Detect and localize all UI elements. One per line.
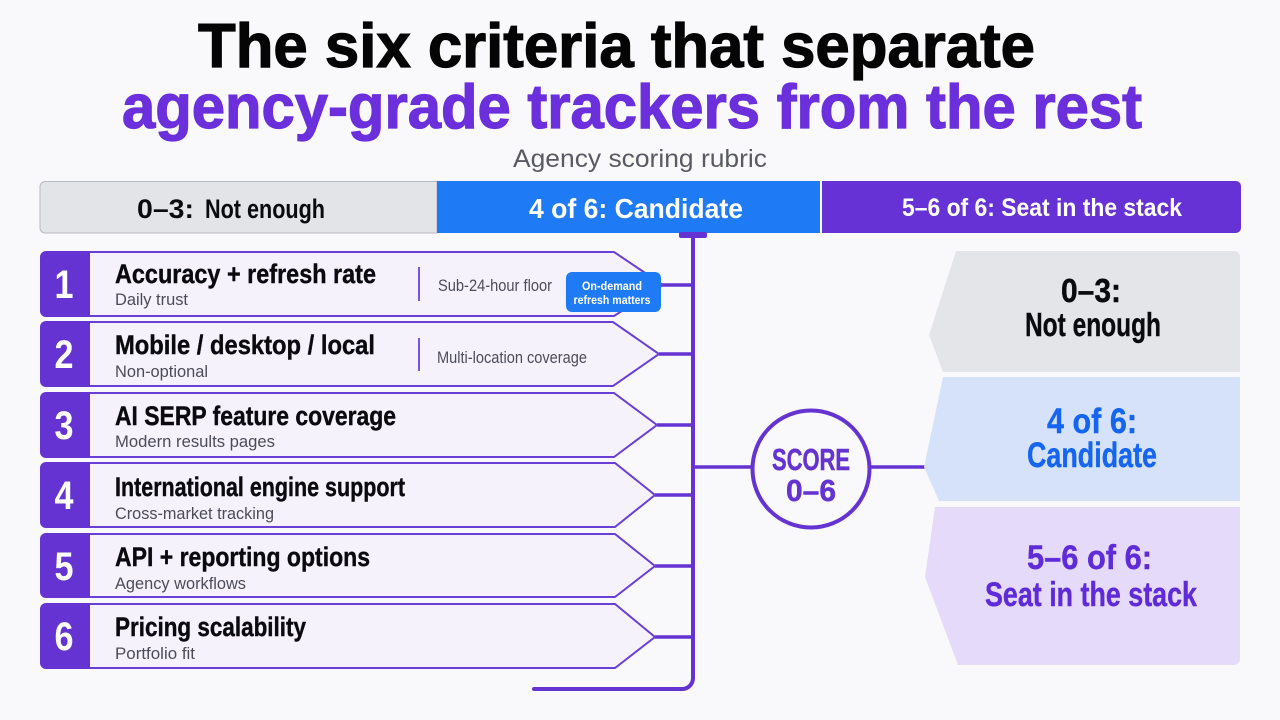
criterion 2: Non-optional: [115, 362, 208, 381]
callout: on-demand refresh: [566, 272, 661, 312]
criterion 6: [40, 603, 655, 669]
criterion 1: Sub-24-hour floor: [438, 276, 552, 295]
outcome panel: not enough: Not enough: [1025, 306, 1161, 343]
criterion 3: Modern results pages: [115, 432, 275, 451]
criterion 5: [40, 533, 655, 598]
criterion 3: [40, 392, 657, 458]
criterion 3: 3: [54, 404, 74, 448]
criterion 1: 1: [54, 263, 74, 307]
criterion 1: Daily trust: [115, 290, 188, 309]
header segment: not enough: Not enough: [205, 194, 325, 224]
outcome panel: seat in the stack: 5–6 of 6:: [1027, 539, 1152, 577]
criterion 6: 6: [54, 615, 74, 659]
criterion 4: International engine support: [115, 472, 405, 502]
title: [122, 12, 1142, 142]
header segment: seat in the stack: 5–6 of 6: Seat in the stack: [902, 194, 1182, 222]
scoring header bar: [40, 181, 1241, 233]
outcome panel: not enough: 0–3:: [1061, 272, 1121, 309]
title: agency-grade trackers from the rest: [122, 73, 1142, 142]
subtitle: Agency scoring rubric: [513, 145, 767, 173]
connector spine and branches: [534, 232, 925, 689]
criterion 5: API + reporting options: [115, 542, 370, 572]
score circle: 0–6: [786, 473, 836, 508]
outcome panel: candidate: [924, 377, 1240, 501]
header segment: candidate: 4 of 6: Candidate: [529, 193, 743, 224]
criterion 1: [40, 251, 663, 317]
header segment: not enough: 0–3:: [137, 194, 194, 224]
score circle: [752, 410, 870, 528]
callout: on-demand refresh: refresh matters: [574, 293, 651, 307]
criterion 6: Portfolio fit: [115, 644, 195, 663]
criterion 4: [40, 462, 655, 528]
criterion 5: 5: [54, 545, 74, 589]
outcome panel: candidate: 4 of 6:: [1047, 402, 1137, 441]
outcome panel: candidate: Candidate: [1027, 436, 1157, 475]
criterion 2: Multi-location coverage: [437, 348, 587, 367]
score circle: SCORE: [772, 442, 850, 477]
criterion 1: Accuracy + refresh rate: [115, 259, 376, 289]
criterion 5: Agency workflows: [115, 574, 246, 593]
title: The six criteria that separate: [198, 12, 1035, 81]
callout: on-demand refresh: On-demand: [582, 279, 642, 293]
criterion 3: AI SERP feature coverage: [115, 401, 396, 431]
criterion 4: Cross-market tracking: [115, 504, 274, 523]
header segment: not enough: [40, 182, 437, 233]
criterion 2: Mobile / desktop / local: [115, 330, 375, 360]
header segment: candidate: [437, 181, 820, 233]
outcome panel: not enough: [929, 251, 1240, 372]
outcome panel: seat in the stack: Seat in the stack: [985, 576, 1197, 614]
criterion 4: 4: [54, 474, 74, 518]
criterion 6: Pricing scalability: [115, 612, 306, 642]
criterion 2: 2: [54, 333, 74, 377]
outcome panel: seat in the stack: [925, 507, 1240, 665]
header segment: seat in the stack: [822, 181, 1241, 233]
criterion 2: [40, 321, 659, 387]
